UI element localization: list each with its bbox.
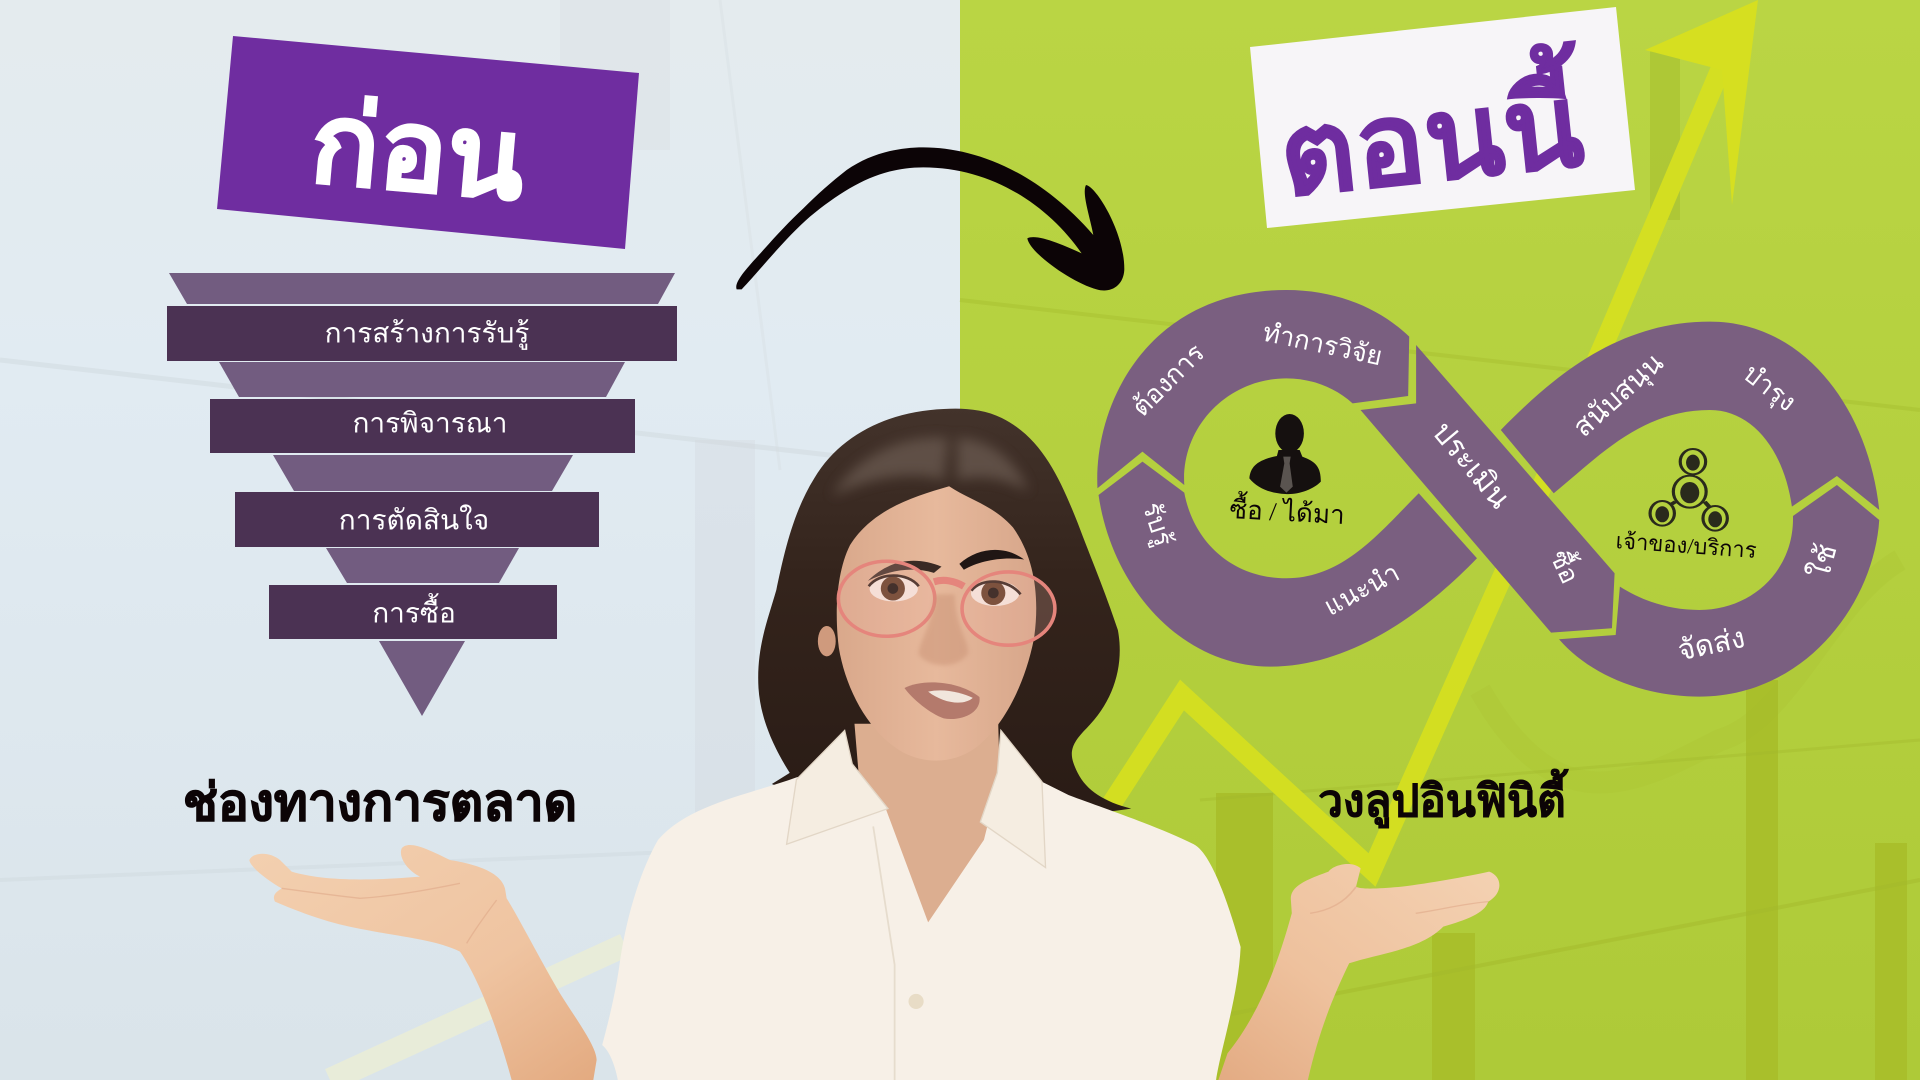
- heading: infinity loop: วงลูปอินฟินิตี้: [1318, 768, 1569, 828]
- eyebrows: [868, 561, 942, 581]
- loop label: evaluate: ประเมิน: [1426, 416, 1516, 515]
- loop label: use: ใช้: [1802, 540, 1844, 582]
- face: [837, 486, 1036, 761]
- banner text: now: ตอนนี้: [1271, 40, 1592, 221]
- yellow rising arrow in background: [1112, 0, 1758, 870]
- icon: network of owners: [1650, 449, 1727, 531]
- left arm and hand: [249, 845, 597, 1080]
- funnel stage 3: การตัดสินใจ: [339, 503, 489, 536]
- eyes: [870, 576, 918, 601]
- funnel stage 2: การพิจารณา: [352, 408, 508, 439]
- loop label: recommend: แนะนำ: [1319, 558, 1404, 622]
- nose: [919, 594, 968, 665]
- loop label: research: ทำการวิจัย: [1260, 318, 1385, 371]
- funnel stage 2: [210, 399, 635, 453]
- hair highlight at parting: [832, 437, 1029, 496]
- funnel stage 1: [167, 306, 677, 361]
- mouth: [904, 682, 980, 719]
- heading: marketing funnel: ช่องทางการตลาด: [183, 773, 577, 831]
- loop segments: [1097, 290, 1879, 697]
- banner: before: [217, 36, 639, 249]
- funnel stage 3: [235, 492, 599, 547]
- banner: now: [1250, 7, 1635, 228]
- loop label: aware: รับรู้: [1136, 499, 1178, 550]
- funnel stage 4: [269, 585, 557, 639]
- funnel diagram: [167, 273, 677, 716]
- loop label: deliver: จัดส่ง: [1675, 622, 1748, 667]
- icon: business person: [1249, 414, 1321, 494]
- loop label: buy: ซื้อ: [1544, 544, 1589, 588]
- loop label: maintain: บำรุง: [1737, 359, 1801, 418]
- curved arrow from before to now: [736, 147, 1124, 290]
- right background panel: [960, 0, 1920, 1080]
- shirt placket and button: [873, 826, 924, 1080]
- hair: [758, 409, 1131, 826]
- loop label: owner or service: เจ้าของ/บริการ: [1615, 528, 1758, 563]
- shirt collar: [787, 730, 1046, 868]
- woman shrugging photo: [249, 409, 1499, 1080]
- glasses: [838, 561, 1055, 645]
- loop label: support: สนับสนุน: [1568, 347, 1670, 444]
- portrait: [602, 409, 1241, 1080]
- banner text: before: ก่อน: [306, 79, 530, 223]
- ear: [818, 626, 836, 656]
- infinity loop diagram: [1097, 290, 1879, 697]
- loop label: buy or acquire: ซื้อ / ได้มา: [1229, 490, 1346, 530]
- funnel stage 1: การสร้างการรับรู้: [325, 318, 529, 350]
- shirt: [602, 764, 1241, 1080]
- right arm and hand: [1218, 864, 1499, 1080]
- neck: [854, 724, 1002, 922]
- funnel stage 4: การซื้อ: [372, 592, 456, 629]
- loop label: want: ต้องการ: [1126, 338, 1210, 422]
- left background panel: [0, 0, 960, 1080]
